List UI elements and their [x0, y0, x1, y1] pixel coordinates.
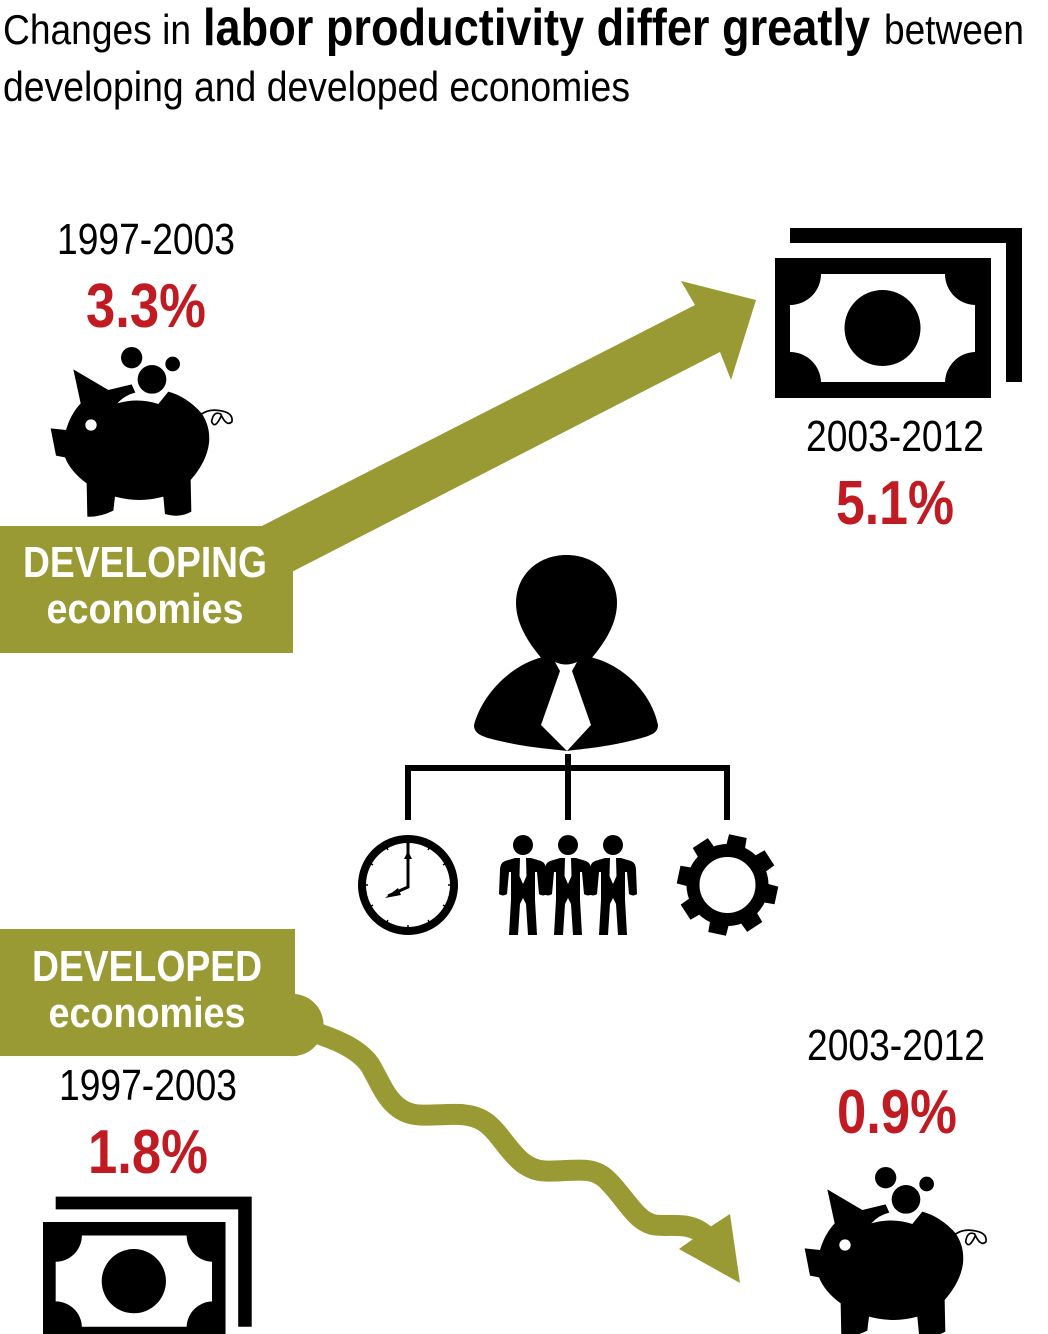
icon: piggy bank developed — [805, 1167, 986, 1334]
icon: gear — [677, 834, 778, 936]
stat: developing 2003-2012: 5.1% — [836, 469, 954, 538]
stat: developing 1997-2003: 1997-2003 — [57, 215, 235, 264]
stat: developed 2003-2012: 2003-2012 — [807, 1021, 985, 1070]
icon: manager — [474, 555, 658, 751]
label: developing economies: DEVELOPING — [23, 538, 267, 587]
org chart connector — [408, 754, 727, 820]
icon: piggy bank developing — [51, 347, 232, 517]
stat: developing 1997-2003: 3.3% — [86, 272, 206, 341]
label: developing economies: economies — [46, 585, 244, 632]
stat: developing 1997-2003 — [57, 215, 235, 341]
label: developed economies: DEVELOPED — [32, 942, 262, 991]
title: labor productivity differ greatly — [203, 0, 870, 57]
label: developed economies — [0, 929, 324, 1056]
stat: developing 2003-2012: 2003-2012 — [806, 412, 984, 461]
title: developing and developed economies — [3, 63, 630, 110]
stat: developed 1997-2003: 1.8% — [88, 1118, 208, 1187]
label: developing economies — [0, 526, 293, 653]
stat: developed 1997-2003: 1997-2003 — [59, 1061, 237, 1110]
title: Changes in — [3, 6, 191, 53]
stat: developing 2003-2012 — [806, 412, 984, 538]
icon: money stack developed — [43, 1197, 252, 1334]
icon: workers — [499, 835, 637, 935]
title — [3, 0, 1024, 110]
title: between — [884, 6, 1024, 53]
label: developed economies: economies — [48, 989, 246, 1036]
stat: developed 2003-2012: 0.9% — [837, 1078, 957, 1147]
icon: clock — [362, 839, 454, 931]
icon: money stack developing — [775, 228, 1022, 398]
stat: developed 2003-2012 — [807, 1021, 985, 1147]
arrow: developed declining wavy — [310, 1031, 740, 1283]
arrow: developing rising — [250, 281, 756, 578]
stat: developed 1997-2003 — [59, 1061, 237, 1187]
